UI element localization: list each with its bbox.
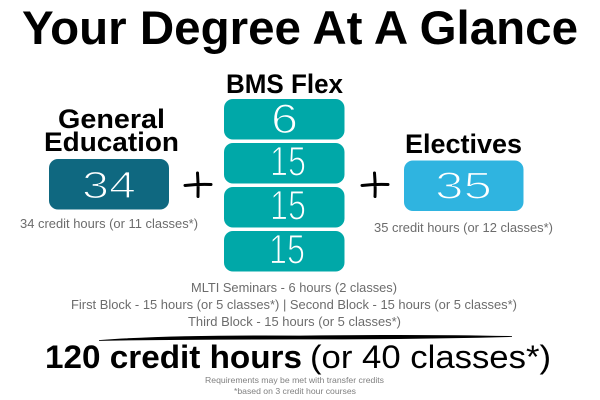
block: first block 15: [224, 138, 344, 184]
underline swoosh: [99, 335, 512, 340]
title: Your Degree At A Glance: [22, 2, 578, 55]
panel: BMS Flex: [224, 69, 344, 272]
block: MLTI seminars 6: [224, 95, 344, 142]
total credit hours: [45, 339, 551, 375]
icon: plus sign right: [362, 173, 388, 196]
heading: general education: Education: [44, 127, 179, 157]
electives caption: 35 credit hours (or 12 classes*): [374, 220, 553, 235]
icon: plus sign left: [185, 173, 211, 196]
electives credit box: 35: [435, 166, 492, 208]
footnotes: *based on 3 credit hour courses: [234, 387, 356, 396]
block: third block 15: [224, 226, 344, 272]
general education credit box: 34: [82, 165, 136, 207]
heading: BMS Flex: BMS Flex: [226, 69, 343, 99]
total credit hours: 120 credit hours: [45, 339, 302, 375]
block: MLTI seminars 6: 6: [271, 95, 298, 142]
footnotes: Requirements may be met with transfer credits: [205, 376, 384, 385]
panel: electives: [374, 129, 553, 235]
footnotes: [205, 376, 384, 396]
block: first block 15: 15: [270, 138, 306, 184]
heading: general education: General: [58, 104, 165, 134]
general education caption: 34 credit hours (or 11 classes*): [20, 216, 198, 231]
text block: BMS Flex breakdown: MLTI Seminars - 6 hours (2 classes): [191, 280, 397, 295]
block: third block 15: 15: [269, 226, 305, 272]
electives credit box: [404, 160, 524, 211]
text block: BMS Flex breakdown: Third Block - 15 hours (or 5 classes*): [188, 314, 401, 329]
total credit hours: (or 40 classes*): [310, 339, 551, 375]
heading: electives: Electives: [405, 129, 522, 159]
block: second block 15: 15: [270, 182, 306, 228]
panel: general education: [20, 104, 198, 231]
general education credit box: [49, 159, 169, 210]
text block: BMS Flex breakdown: First Block - 15 hours (or 5 classes*) | Second Block - 15 hours (or 5 classes*): [71, 297, 517, 312]
block: second block 15: [224, 182, 344, 228]
text block: BMS Flex breakdown: [71, 280, 517, 329]
heading: general education: [44, 104, 179, 157]
